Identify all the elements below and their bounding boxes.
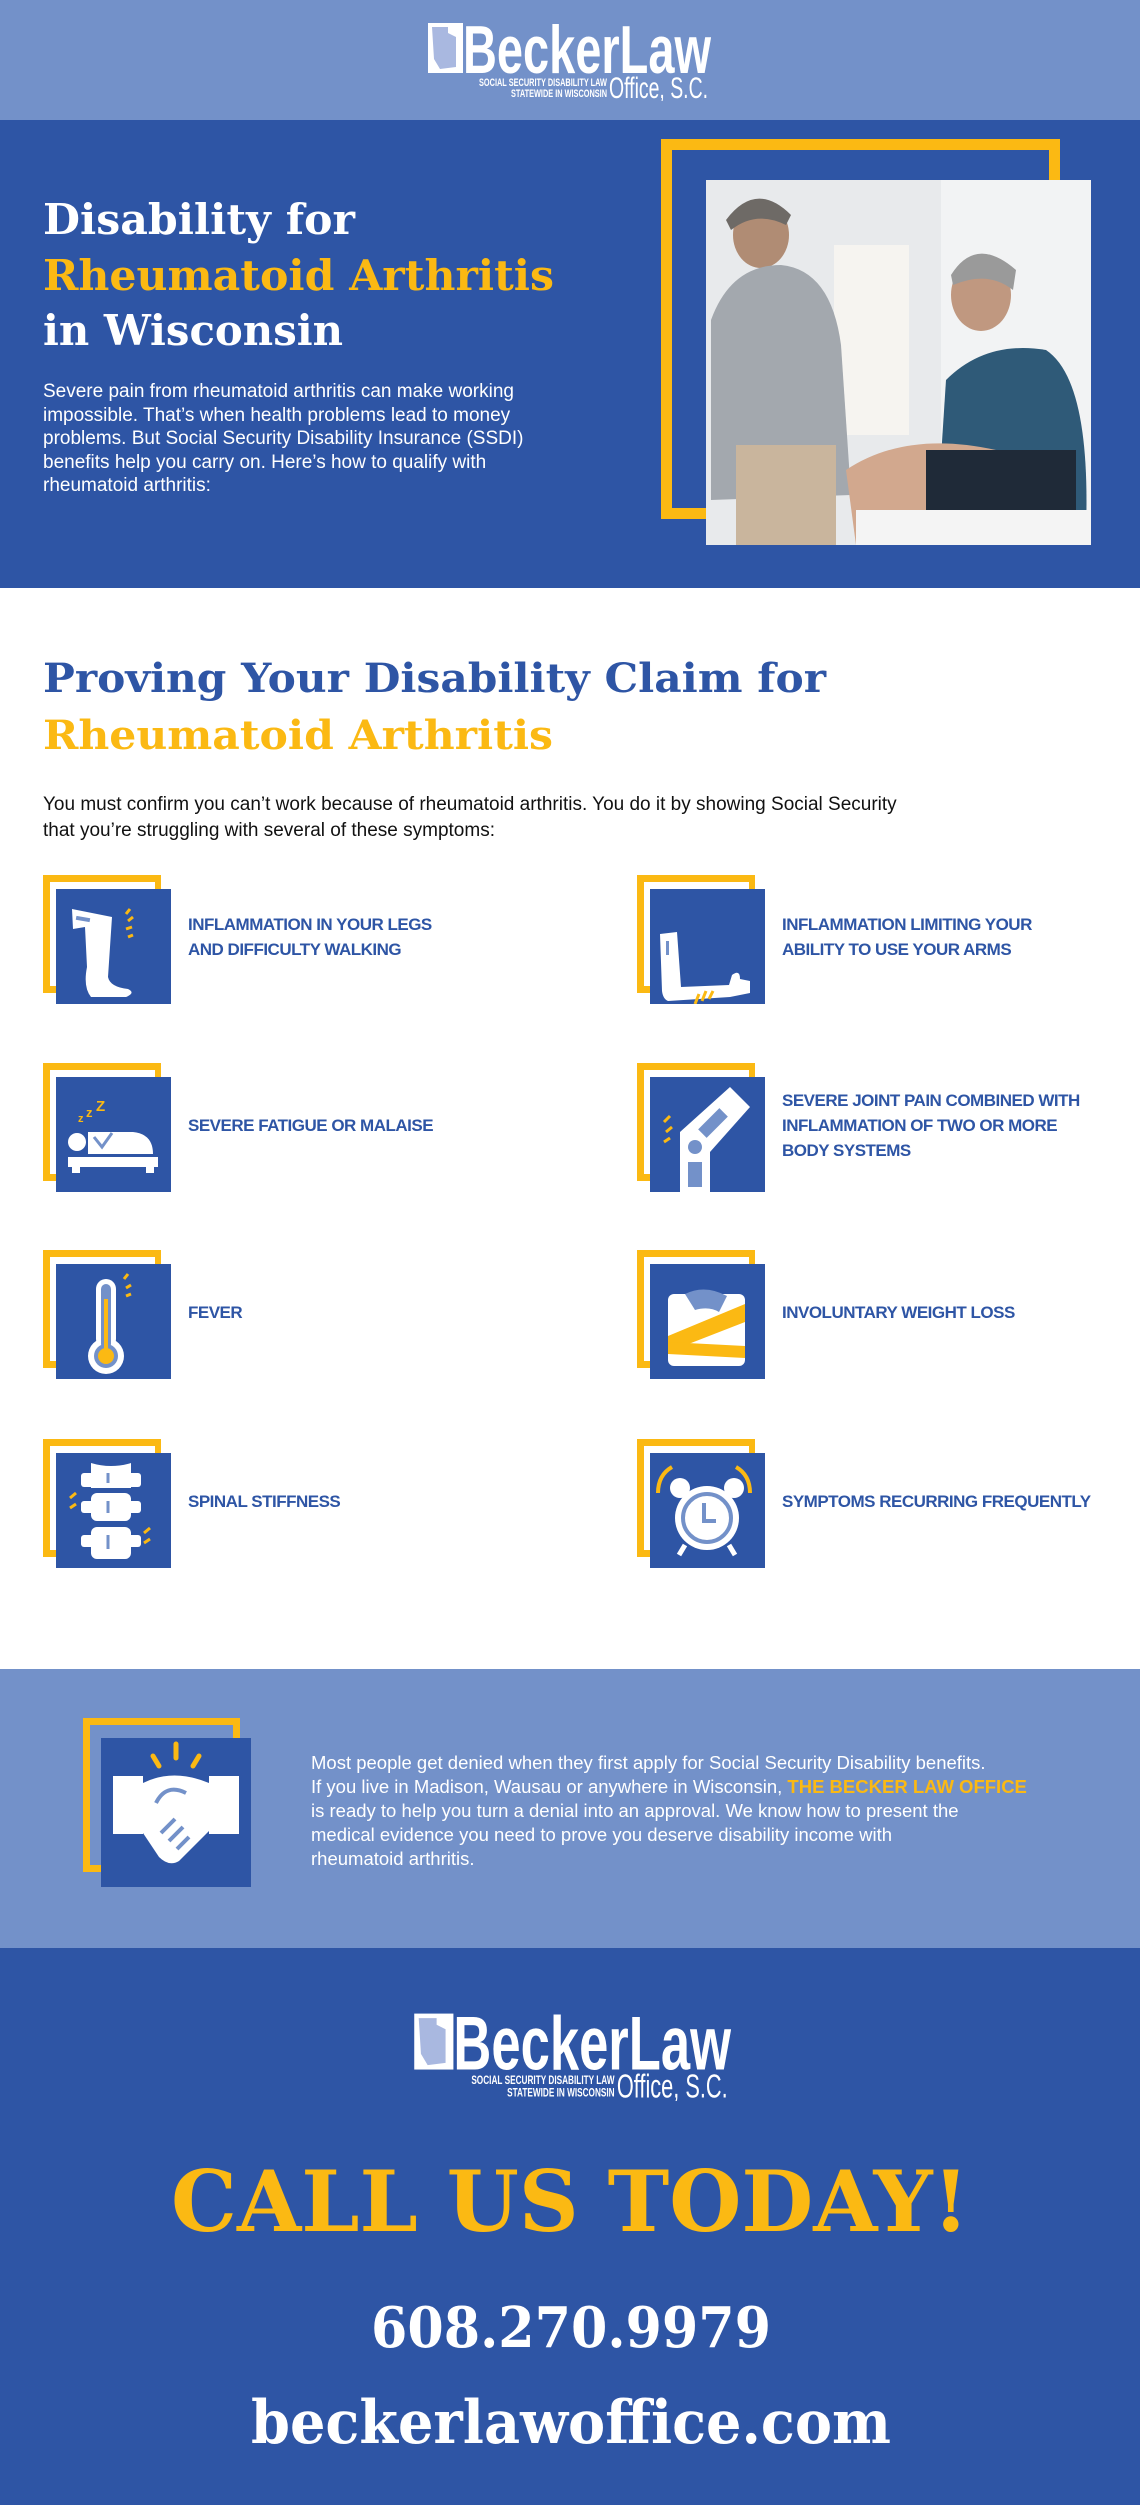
symptom: legs: AND DIFFICULTY WALKING bbox=[188, 940, 401, 959]
hero intro paragraph bbox=[43, 381, 523, 496]
photo: doctor examining patient's knee bbox=[706, 180, 1091, 545]
symptom: legs: INFLAMMATION IN YOUR LEGS bbox=[188, 915, 432, 934]
logo: Becker Law: SOCIAL SECURITY DISABILITY LAW bbox=[479, 77, 607, 89]
symptom: recurring: SYMPTOMS RECURRING FREQUENTLY bbox=[782, 1492, 1091, 1510]
icon: alarm clock bbox=[650, 1453, 765, 1568]
icon: spine bbox=[56, 1453, 171, 1568]
callout band bbox=[0, 1669, 1140, 1948]
icon: sleeping person: Z bbox=[96, 1098, 105, 1115]
callout text bbox=[311, 1752, 1027, 1869]
symptom: spine: SPINAL STIFFNESS bbox=[188, 1492, 340, 1510]
header bar bbox=[0, 0, 1140, 120]
symptom: fever bbox=[43, 1250, 242, 1379]
footer logo: SOCIAL SECURITY DISABILITY LAW bbox=[471, 2073, 615, 2087]
hero title bbox=[43, 195, 554, 355]
photo frame (yellow) bbox=[661, 139, 1060, 519]
symptom: spine bbox=[43, 1439, 340, 1568]
footer logo: STATEWIDE IN WISCONSIN bbox=[507, 2085, 615, 2099]
symptom: joint pain: BODY SYSTEMS bbox=[782, 1140, 911, 1160]
callout text: If you live in Madison, Wausau or anywhere in Wisconsin, THE BECKER LAW OFFICE bbox=[311, 1776, 1027, 1797]
hero title: in Wisconsin bbox=[43, 306, 343, 355]
symptom: arms bbox=[637, 875, 1032, 1004]
hero title: Rheumatoid Arthritis bbox=[43, 251, 554, 300]
section intro text: You must confirm you can’t work because of rheumatoid arthritis. You do it by showing Social Security bbox=[43, 794, 897, 815]
section intro text bbox=[43, 794, 897, 841]
symptom: joint pain bbox=[637, 1063, 1080, 1192]
hero intro paragraph: problems. But Social Security Disability Insurance (SSDI) bbox=[43, 428, 523, 449]
hero intro paragraph: rheumatoid arthritis: bbox=[43, 475, 211, 496]
symptom: joint pain: INFLAMMATION OF TWO OR MORE bbox=[782, 1116, 1057, 1134]
icon: sleeping person: z bbox=[86, 1105, 93, 1120]
call to action: 608.270.9979 bbox=[371, 2295, 771, 2361]
icon: sleeping person: z bbox=[78, 1113, 84, 1125]
icon: sleeping person bbox=[56, 1077, 171, 1192]
icon: knee joint bbox=[650, 1077, 765, 1192]
icon: arm bbox=[650, 889, 765, 1004]
hero intro paragraph: Severe pain from rheumatoid arthritis can make working bbox=[43, 381, 514, 402]
symptom: weight loss bbox=[637, 1250, 1015, 1379]
symptom: weight loss: INVOLUNTARY WEIGHT LOSS bbox=[782, 1302, 1015, 1322]
icon: leg bbox=[56, 889, 171, 1004]
callout text: medical evidence you need to prove you deserve disability income with bbox=[311, 1824, 892, 1845]
symptom: fatigue: SEVERE FATIGUE OR MALAISE bbox=[188, 1116, 433, 1134]
hero title: Disability for bbox=[43, 195, 356, 244]
icon: scale with tape bbox=[650, 1264, 765, 1379]
section heading: proving your claim: Rheumatoid Arthritis bbox=[43, 712, 553, 759]
hero intro paragraph: benefits help you carry on. Here’s how to qualify with bbox=[43, 452, 486, 472]
call to action: beckerlawoffice.com bbox=[251, 2388, 891, 2458]
icon: handshake bbox=[83, 1718, 251, 1887]
hero section bbox=[0, 120, 1140, 588]
call to action: CALL US TODAY! bbox=[171, 2152, 969, 2251]
symptom: joint pain: SEVERE JOINT PAIN COMBINED WITH bbox=[782, 1090, 1080, 1110]
icon: thermometer bbox=[56, 1264, 171, 1379]
callout text: Most people get denied when they first apply for Social Security Disability benefits. bbox=[311, 1752, 986, 1773]
symptom: recurring bbox=[637, 1439, 1091, 1568]
symptom: fever: FEVER bbox=[188, 1302, 242, 1322]
symptom: arms: INFLAMMATION LIMITING YOUR bbox=[782, 915, 1032, 934]
call to action bbox=[171, 2152, 969, 2458]
section intro text: that you’re struggling with several of these symptoms: bbox=[43, 820, 495, 841]
section heading: proving your claim bbox=[43, 655, 827, 759]
footer bbox=[0, 1948, 1140, 2505]
callout text: is ready to help you turn a denial into an approval. We know how to present the bbox=[311, 1800, 959, 1821]
callout text: rheumatoid arthritis. bbox=[311, 1848, 474, 1869]
symptom: legs bbox=[43, 875, 432, 1004]
hero intro paragraph: impossible. That’s when health problems lead to money bbox=[43, 404, 510, 426]
section heading: proving your claim: Proving Your Disability Claim for bbox=[43, 655, 827, 702]
symptom: arms: ABILITY TO USE YOUR ARMS bbox=[782, 940, 1011, 959]
symptom: fatigue bbox=[43, 1063, 433, 1192]
logo: Becker Law: STATEWIDE IN WISCONSIN bbox=[511, 88, 607, 100]
